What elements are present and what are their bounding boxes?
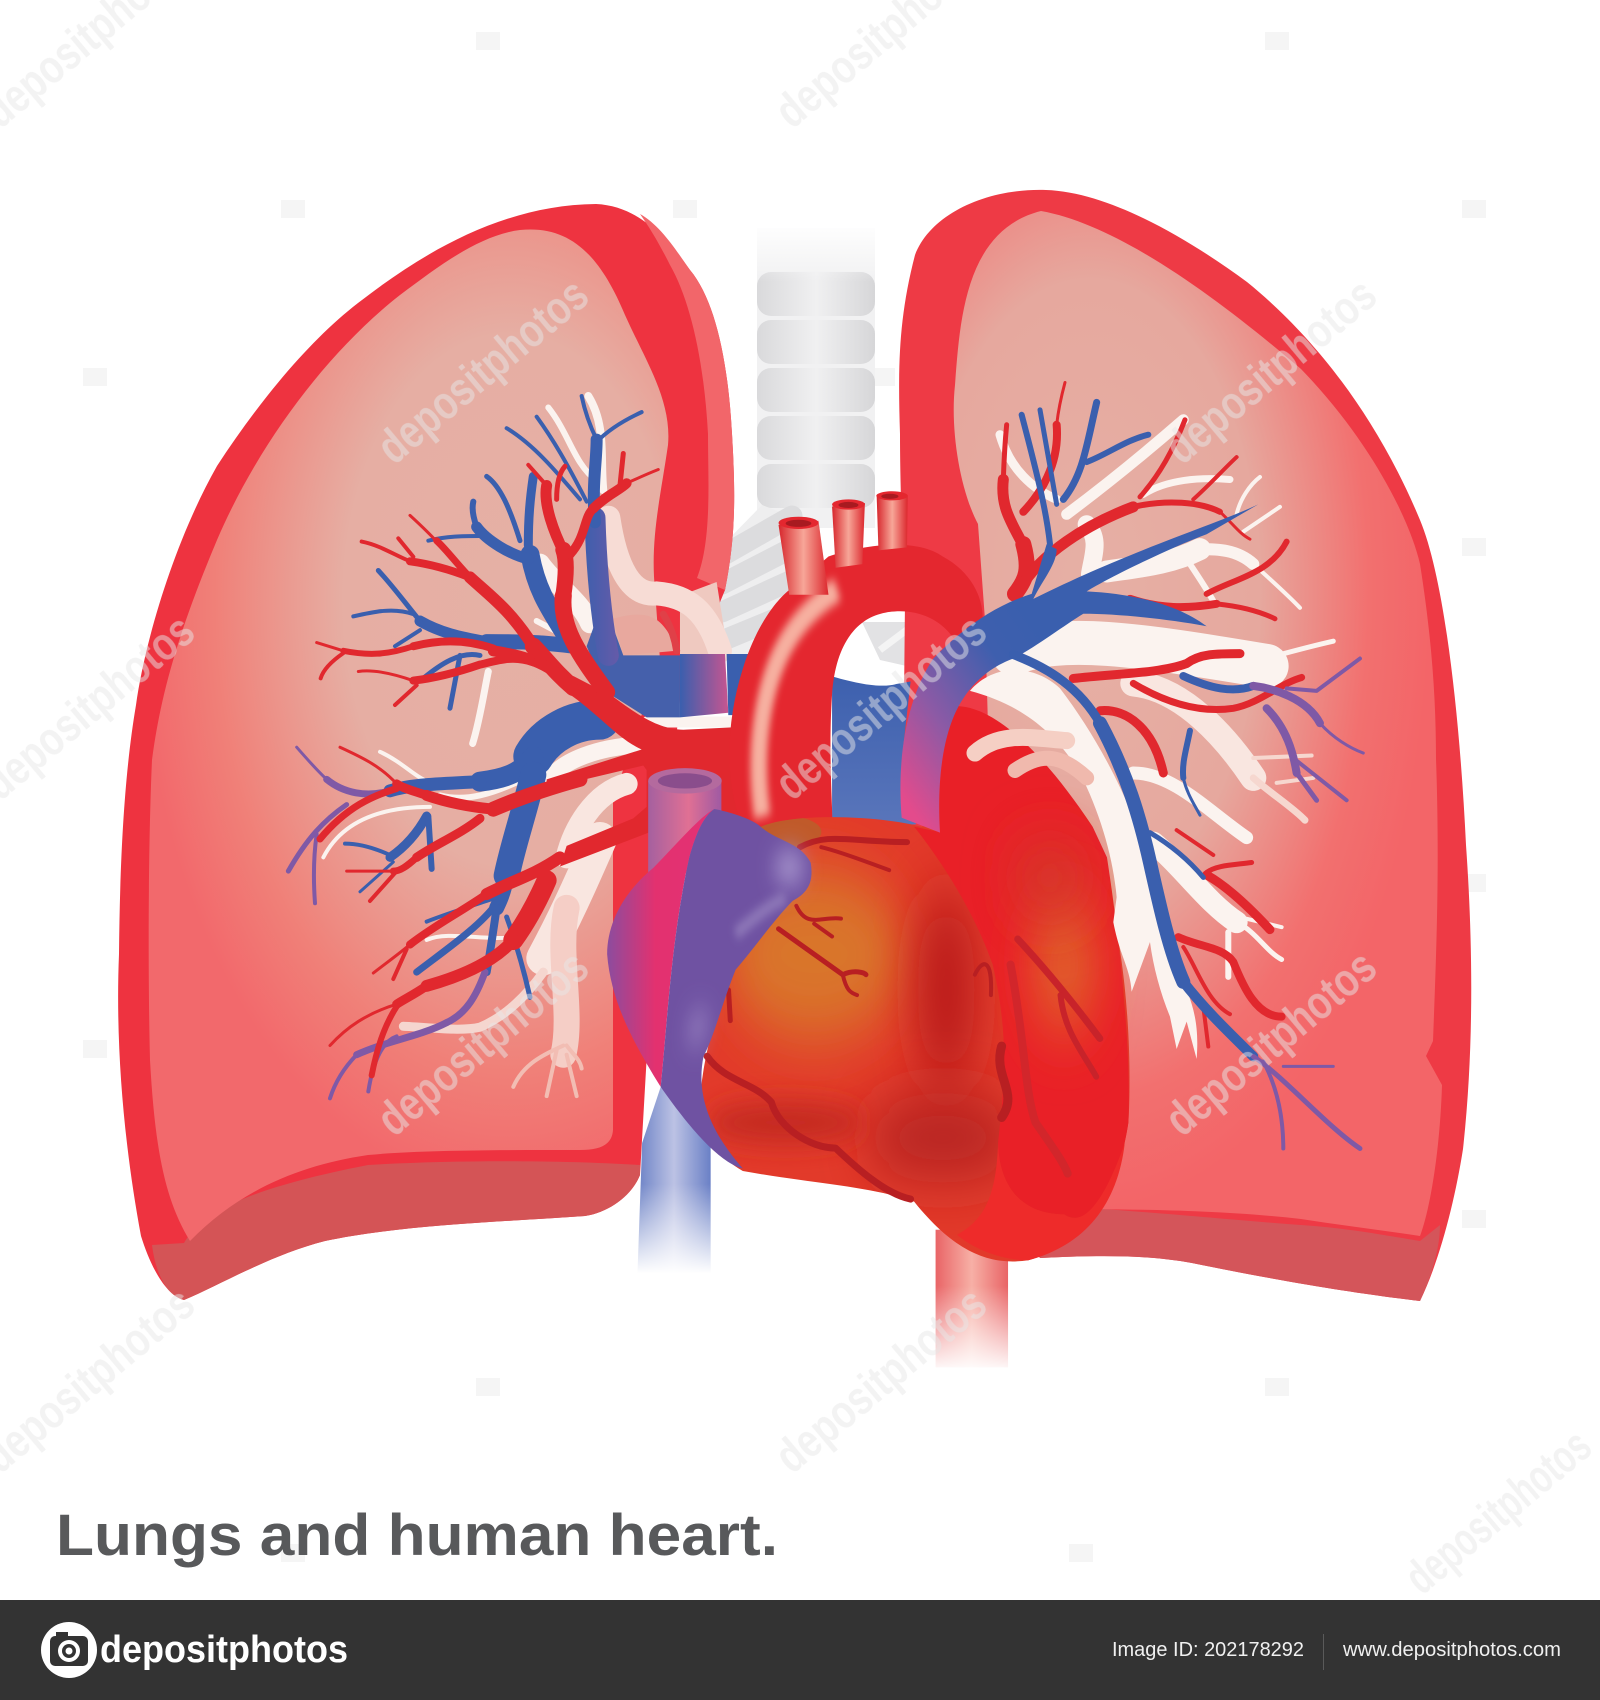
title: Lungs and human heart. — [56, 1503, 778, 1568]
left pulmonary veins (blue) — [288, 396, 750, 1098]
right lung outer wall — [899, 190, 1471, 1301]
right lung lower lip — [1040, 1205, 1440, 1301]
watermarks: depositphotos — [1154, 939, 1386, 1146]
right bronchial tree — [970, 420, 1333, 1059]
right pulmonary arteries (red) — [1003, 382, 1302, 1047]
watermarks: depositphotos — [366, 939, 598, 1146]
heart body — [702, 817, 1130, 1262]
panel: venae cavae and right atrium — [607, 768, 812, 1168]
website url: www.depositphotos.com — [1342, 1639, 1561, 1661]
right atrium purple — [661, 809, 812, 1168]
left bronchial tree — [323, 396, 730, 1096]
icon: camera logo — [41, 1622, 97, 1678]
lung outer wall — [118, 204, 734, 1300]
logo wordmark: depositphotos — [100, 1629, 348, 1671]
lung inner tissue — [149, 229, 668, 1241]
panel: left lung vessels and bronchi — [288, 396, 750, 1098]
image id: Image ID: 202178292 — [1112, 1639, 1304, 1661]
right pulmonary veins (blue) — [900, 402, 1363, 1148]
watermarks: depositphotos — [764, 1276, 996, 1483]
trachea — [716, 222, 915, 668]
superior vena cava — [648, 768, 722, 873]
panel: heart group — [634, 491, 1171, 1373]
right atrium pink wall — [607, 809, 714, 1087]
coronary vessels — [707, 839, 1100, 1199]
panel: left lung — [118, 204, 734, 1300]
descending aorta — [934, 1230, 1011, 1372]
watermarks: depositphotos — [764, 603, 996, 810]
watermarks: depositphotos — [1154, 267, 1386, 474]
right lung inner tissue — [954, 211, 1442, 1236]
footer bar — [0, 1600, 1600, 1700]
watermarks: depositphotos — [366, 267, 598, 474]
heart lobe orange glow — [1007, 847, 1096, 1036]
lung lower lip — [152, 1161, 640, 1300]
heart right lobe overlay — [914, 706, 1129, 1218]
panel: right lung — [899, 190, 1471, 1301]
left pulmonary arteries (red) — [317, 453, 750, 1075]
central pulmonary blue vessel — [832, 676, 916, 829]
panel: right lung vessels and bronchi — [900, 382, 1363, 1148]
lung light rim — [640, 214, 734, 590]
aorta branches — [778, 491, 908, 595]
inferior vena cava — [634, 1087, 714, 1279]
heart lobe lower band — [957, 1143, 1125, 1260]
camera watermark marks — [83, 32, 1486, 1562]
aorta arch — [729, 491, 983, 832]
